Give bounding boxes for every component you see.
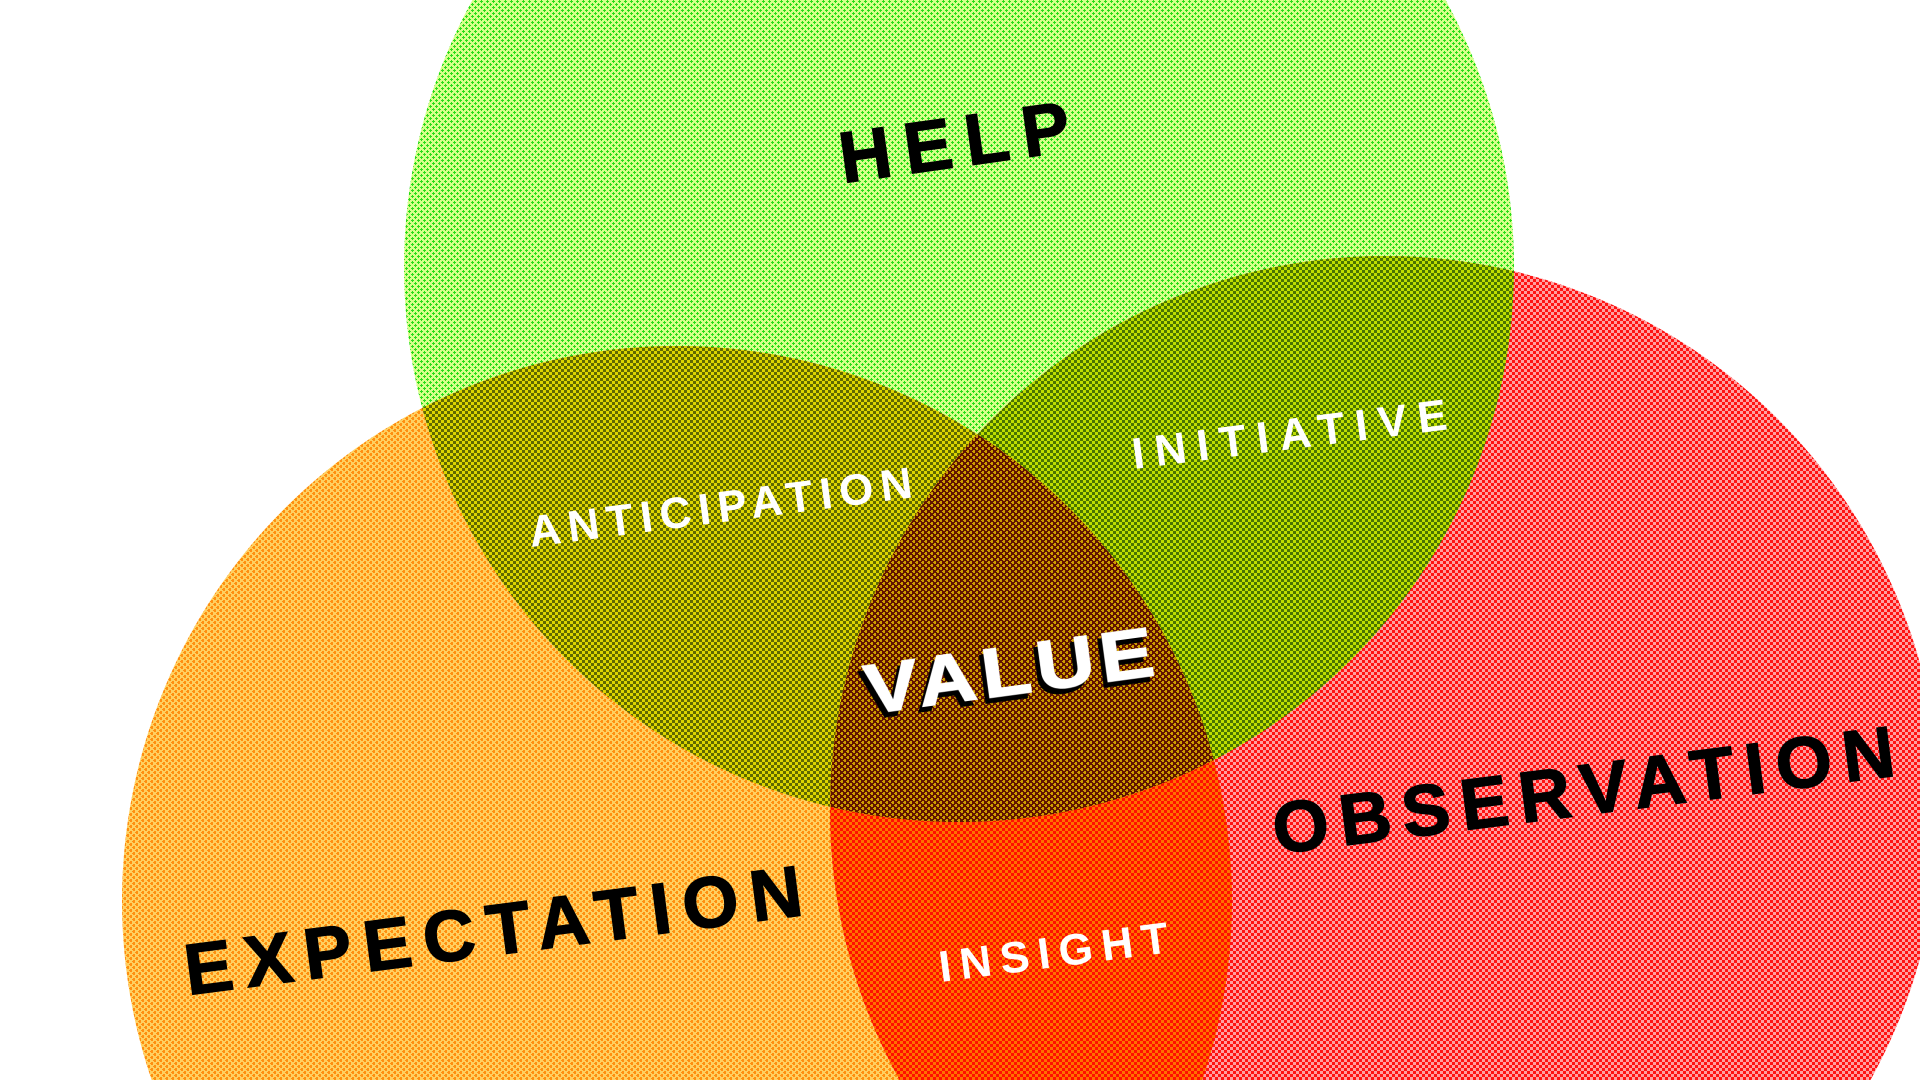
circle: expectation xyxy=(122,346,1232,1080)
overlap: initiative xyxy=(978,256,1514,760)
overlap: value xyxy=(830,434,1214,822)
label: initiative: INITIATIVE xyxy=(1129,391,1450,479)
overlap: insight xyxy=(830,434,1232,1080)
overlap: anticipation xyxy=(422,346,978,807)
circle: observation xyxy=(830,256,1920,1080)
label: value: VALUE xyxy=(860,612,1158,729)
label: observation: OBSERVATION xyxy=(1268,712,1899,870)
circle: help xyxy=(404,0,1514,822)
label: help: HELP xyxy=(834,87,1075,199)
label: insight: INSIGHT xyxy=(936,914,1171,992)
label: expectation: EXPECTATION xyxy=(180,851,807,1011)
label: anticipation: ANTICIPATION xyxy=(526,459,915,557)
